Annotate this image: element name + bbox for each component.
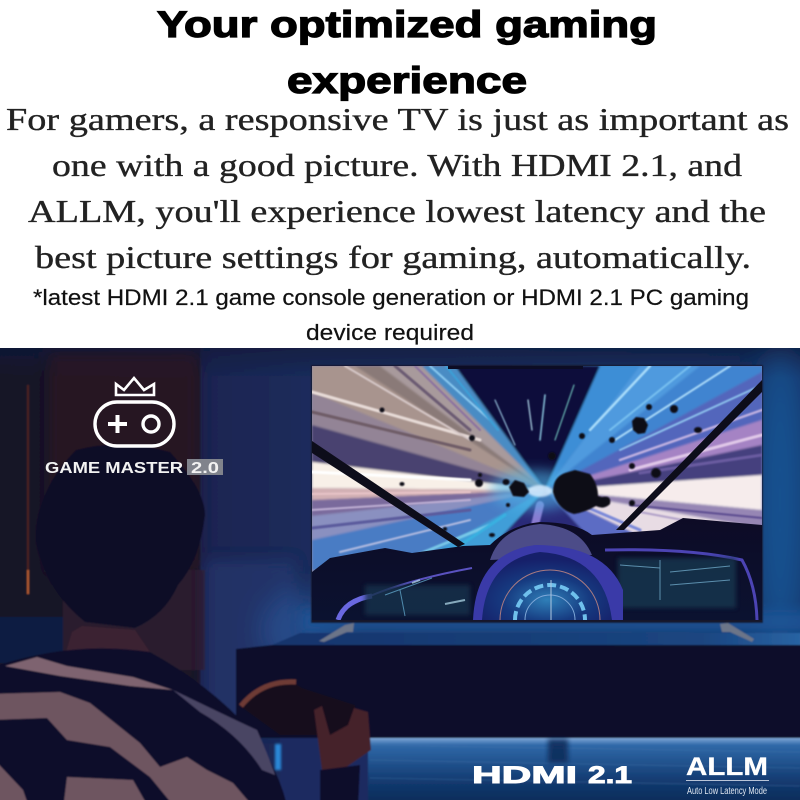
intro paragraph (6, 101, 789, 275)
footnote: device required (306, 320, 474, 345)
sweater stripe: middle (0, 692, 256, 800)
room scene (0, 338, 800, 800)
title: experience (287, 60, 527, 101)
icon: crown (116, 378, 154, 395)
sweater stripe: upper (5, 657, 173, 690)
cockpit struts (312, 380, 762, 547)
allm logo: ALLM (686, 753, 768, 781)
hdmi 2.1 logo: 2.1 (588, 762, 632, 789)
dashboard display left (365, 578, 470, 616)
tv glow (300, 610, 800, 634)
tv frame (311, 365, 763, 623)
tv stand cabinet (236, 633, 800, 738)
intro paragraph: ALLM, you'll experience lowest latency and the (28, 193, 766, 229)
tv screen (312, 366, 762, 620)
allm logo (686, 757, 769, 796)
floor (280, 738, 800, 800)
central dome (490, 524, 592, 560)
person (0, 444, 371, 800)
sweater stripe: shoulder (173, 690, 275, 775)
top edge notch (448, 366, 583, 369)
sweater stripe: lower (63, 777, 150, 800)
footnote: *latest HDMI 2.1 game console generation or HDMI 2.1 PC gaming (33, 285, 749, 310)
tv feet (319, 623, 754, 642)
icon: gamepad (95, 402, 174, 446)
intro paragraph: one with a good picture. With HDMI 2.1, and (52, 147, 742, 183)
center flash (490, 470, 580, 510)
controller and hands (242, 684, 355, 735)
warp speed rays (312, 366, 762, 570)
fine streaks (312, 366, 762, 562)
game master label (46, 459, 223, 475)
dashboard display right (618, 558, 736, 608)
intro paragraph: For gamers, a responsive TV is just as important as (6, 101, 789, 137)
neck (66, 626, 150, 652)
footnote (33, 285, 749, 345)
intro paragraph: best picture settings for gaming, automatically. (35, 239, 751, 275)
asteroids (380, 404, 702, 537)
cockpit dashboard (312, 518, 762, 620)
hdmi 2.1 logo (474, 766, 632, 784)
sweater (0, 648, 288, 800)
game master logo (95, 378, 174, 446)
game master label: GAME MASTER (45, 460, 184, 477)
game master label: 2.0 (191, 460, 219, 477)
gaming room photo (0, 338, 800, 800)
hdmi 2.1 logo: HDMI (472, 762, 577, 789)
room wall (0, 338, 800, 800)
allm logo: Auto Low Latency Mode (687, 786, 767, 797)
title (157, 4, 657, 101)
head (36, 444, 205, 628)
title: Your optimized gaming (157, 4, 657, 45)
central radar dial (473, 545, 623, 620)
